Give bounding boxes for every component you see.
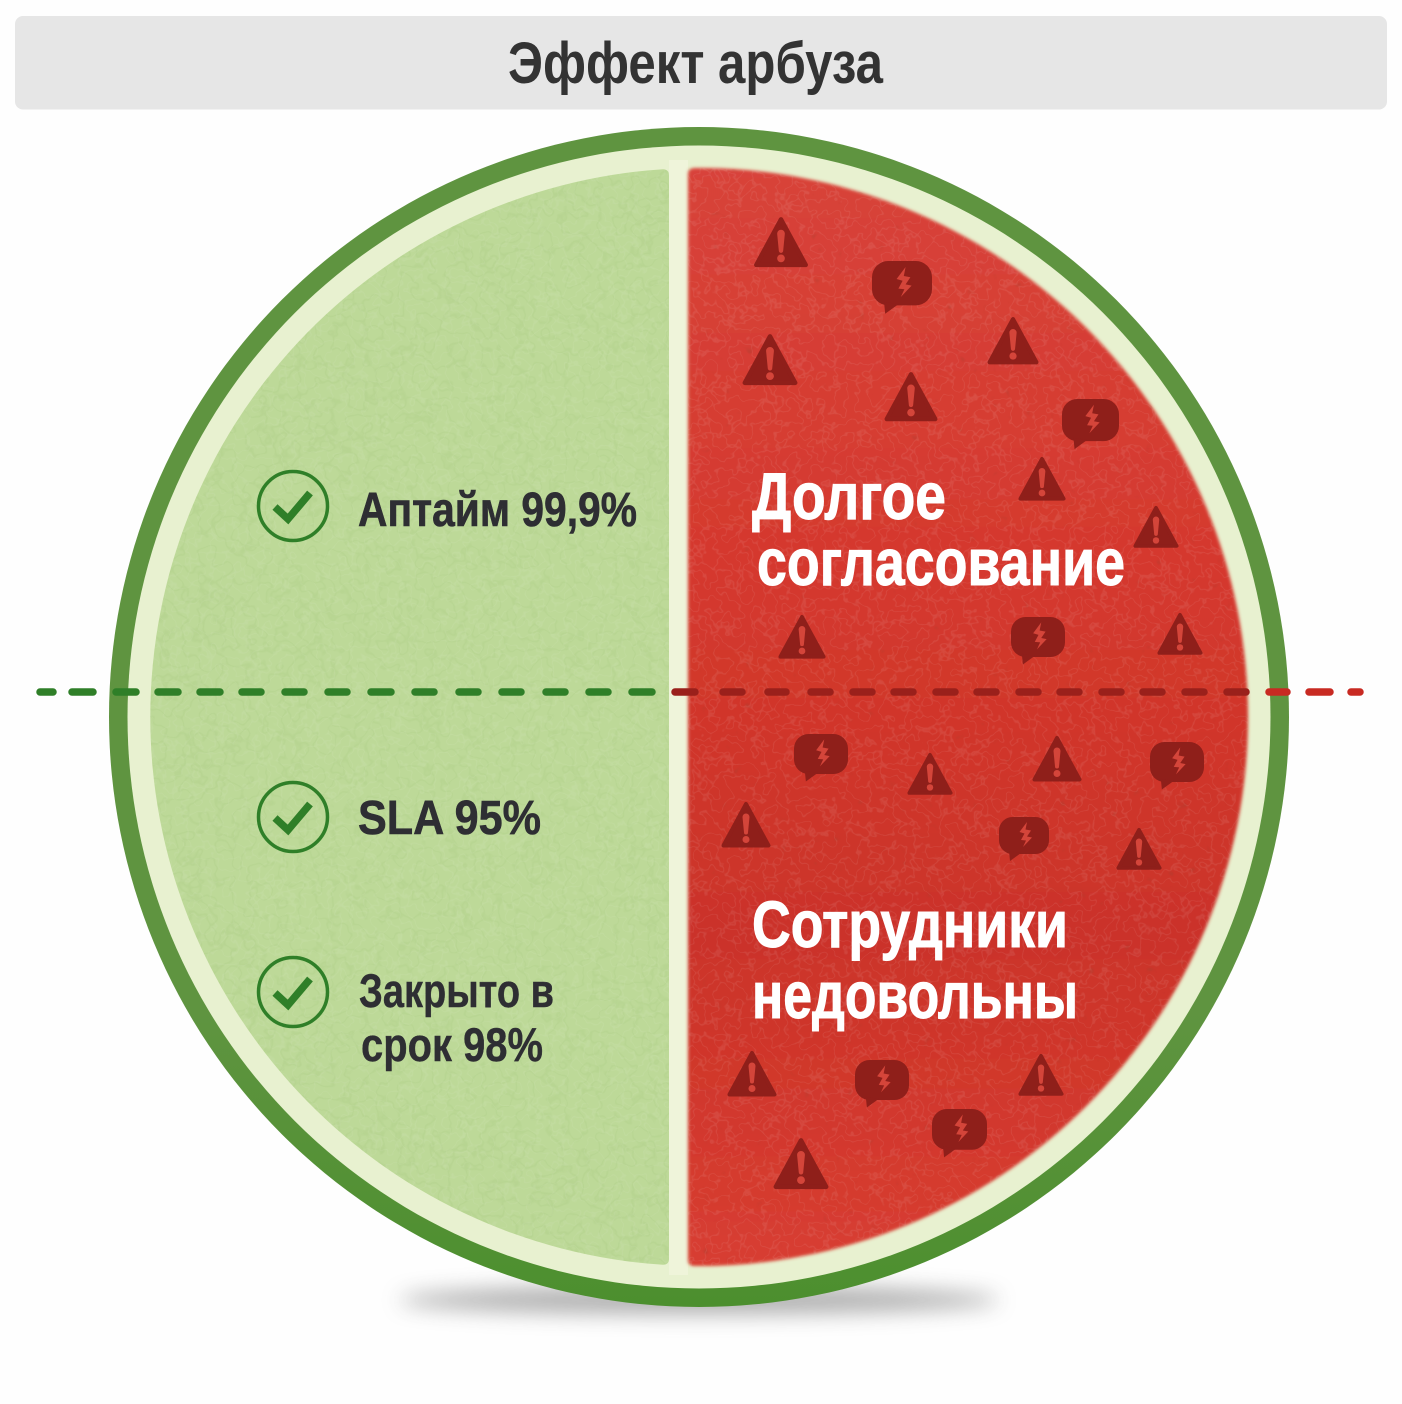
title: Эффект арбуза bbox=[508, 31, 884, 96]
watermelon rind bbox=[109, 127, 1289, 1307]
text: long approvals bbox=[752, 459, 1125, 599]
title bar bbox=[15, 16, 1387, 110]
check item: closed on time: Закрыто в bbox=[359, 964, 554, 1017]
check item: closed on time bbox=[258, 958, 554, 1071]
text: long approvals: согласование bbox=[757, 525, 1125, 599]
check item: uptime: Аптайм 99,9% bbox=[358, 484, 637, 537]
text: long approvals: Долгое bbox=[752, 459, 946, 533]
dashed divider line bbox=[40, 688, 1360, 696]
warning icons bbox=[724, 219, 1201, 1187]
text: unhappy employees: недовольны bbox=[752, 958, 1078, 1032]
complaint bubble icons bbox=[794, 261, 1204, 1157]
panel: red half (hidden problems) bbox=[688, 160, 1258, 1270]
text: unhappy employees: Сотрудники bbox=[752, 887, 1068, 961]
panel: green half (metrics) bbox=[150, 160, 670, 1270]
check item: SLA bbox=[258, 782, 541, 852]
check item: uptime bbox=[258, 472, 637, 540]
ground shadow bbox=[399, 1286, 999, 1314]
text: unhappy employees bbox=[752, 887, 1078, 1032]
check item: SLA: SLA 95% bbox=[358, 792, 541, 845]
check item: closed on time: срок 98% bbox=[361, 1018, 543, 1071]
